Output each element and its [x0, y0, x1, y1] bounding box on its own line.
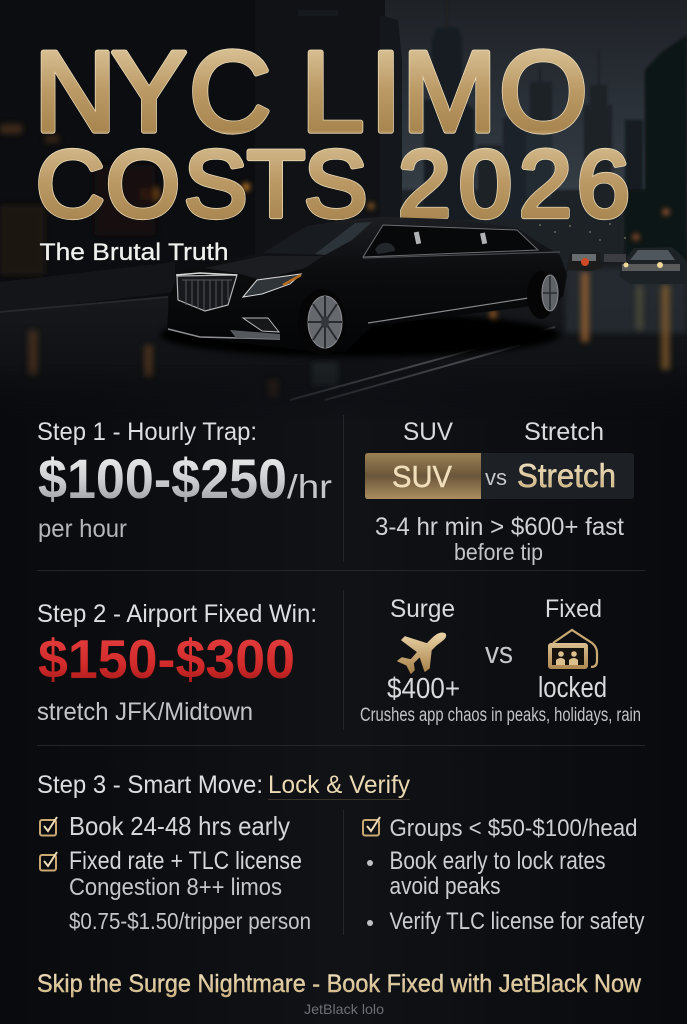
- distant skyline: [400, 0, 650, 260]
- lane markings: [290, 327, 555, 400]
- road reflections: [28, 272, 670, 398]
- caption: per hour: [38, 515, 127, 543]
- title: NYC LIMO COSTS 2026: LIMO: [301, 29, 588, 156]
- hood highlight: [205, 256, 323, 280]
- title: NYC LIMO COSTS 2026: COSTS: [36, 132, 367, 238]
- title: NYC LIMO COSTS 2026: LIMO: [301, 29, 588, 156]
- left checklist: Fixed rate + TLC license: [69, 847, 302, 875]
- road: [0, 262, 687, 400]
- windshield: [263, 222, 373, 255]
- toggle badge: Stretch: [517, 457, 616, 494]
- toggle badge: [365, 453, 634, 499]
- section dividers: [37, 415, 645, 935]
- surge price: $400+: [387, 673, 460, 705]
- right car: [619, 247, 687, 284]
- grille: [176, 273, 237, 311]
- sidewalk: [0, 262, 175, 313]
- column labels: [390, 595, 602, 623]
- rear wheel: [527, 271, 558, 319]
- left checklist: Congestion 8++ limos: [69, 874, 282, 901]
- caption: stretch JFK/Midtown: [37, 698, 253, 726]
- car shadow: [160, 313, 560, 357]
- icon: plane: [398, 633, 445, 673]
- right tower: [625, 35, 687, 270]
- beltline: [363, 252, 560, 258]
- icon: checkbox: [40, 817, 57, 836]
- car body: [167, 217, 567, 352]
- price: $100-$250: [38, 447, 287, 510]
- title: NYC LIMO COSTS 2026: [34, 29, 630, 238]
- unit: /hr: [287, 468, 332, 505]
- column labels: [403, 418, 604, 446]
- warm street lights: [0, 124, 669, 275]
- fixed label: locked: [538, 672, 607, 704]
- column labels: Surge: [390, 595, 455, 623]
- price: $150-$300: [38, 628, 295, 690]
- headlight: [243, 274, 301, 297]
- panel: step 3 smart move: [37, 771, 644, 935]
- panel: step 2 airport fixed win: [37, 600, 317, 726]
- distant city lights: [519, 223, 626, 241]
- comparison: SUV vs Stretch: [365, 418, 634, 565]
- title: NYC LIMO COSTS 2026: 2026: [398, 132, 630, 238]
- heading: Lock & Verify: [268, 771, 410, 799]
- title: NYC LIMO COSTS 2026: NYC: [34, 29, 271, 156]
- right checklist: [363, 815, 644, 935]
- left dark buildings: [0, 0, 255, 300]
- bumper chrome: [168, 329, 280, 339]
- heading: Step 3 - Smart Move:: [37, 771, 263, 799]
- heading: Step 1 - Hourly Trap:: [37, 418, 257, 446]
- heading: [37, 771, 410, 800]
- front wheel: [298, 289, 346, 355]
- column labels: Fixed: [545, 595, 602, 623]
- hero photo: rainy city street: [0, 0, 687, 400]
- icon: checkbox: [363, 817, 380, 836]
- far traffic: cars: [566, 247, 687, 284]
- icon: garage with passengers: [548, 630, 597, 669]
- mirror: [375, 243, 395, 254]
- side windows: [363, 225, 538, 257]
- title: NYC LIMO COSTS 2026: 2026: [398, 132, 630, 238]
- left checklist: $0.75-$1.50/tripper person: [69, 908, 311, 934]
- subtitle: The Brutal Truth: [40, 239, 228, 266]
- left checklist: Book 24-48 hrs early: [69, 811, 290, 841]
- toggle badge: SUV: [392, 459, 452, 494]
- rocker chrome: [368, 297, 535, 323]
- heading: Step 2 - Airport Fixed Win:: [37, 600, 317, 628]
- vs: vs: [485, 635, 513, 670]
- left checklist: [40, 811, 311, 934]
- panel: step 1 hourly trap: [37, 418, 332, 543]
- small car: [566, 252, 602, 271]
- right checklist: avoid peaks: [390, 873, 500, 900]
- lower dark panel: [268, 372, 426, 401]
- column labels: Stretch: [524, 418, 604, 446]
- note: 3-4 hr min > $600+ fast: [375, 513, 624, 541]
- note second line: before tip: [454, 539, 543, 565]
- comparison: surge vs fixed: [360, 595, 641, 726]
- title: NYC LIMO COSTS 2026: NYC: [34, 29, 271, 156]
- right checklist: Book early to lock rates: [390, 847, 606, 875]
- toggle badge: vs: [485, 465, 507, 490]
- sky: [380, 0, 687, 270]
- title: NYC LIMO COSTS 2026: COSTS: [36, 132, 367, 238]
- icon: checkbox: [40, 852, 57, 870]
- call to action: Skip the Surge Nightmare - Book Fixed with JetBlack Now: [37, 970, 642, 998]
- fog lamp: [243, 318, 279, 332]
- right checklist: Verify TLC license for safety: [390, 908, 644, 935]
- right checklist: Groups < $50-$100/head: [390, 815, 638, 842]
- column labels: SUV: [403, 418, 453, 446]
- footer logo text: JetBlack lolo: [304, 1001, 384, 1017]
- window pillars: [414, 232, 487, 244]
- limousine: [160, 217, 567, 357]
